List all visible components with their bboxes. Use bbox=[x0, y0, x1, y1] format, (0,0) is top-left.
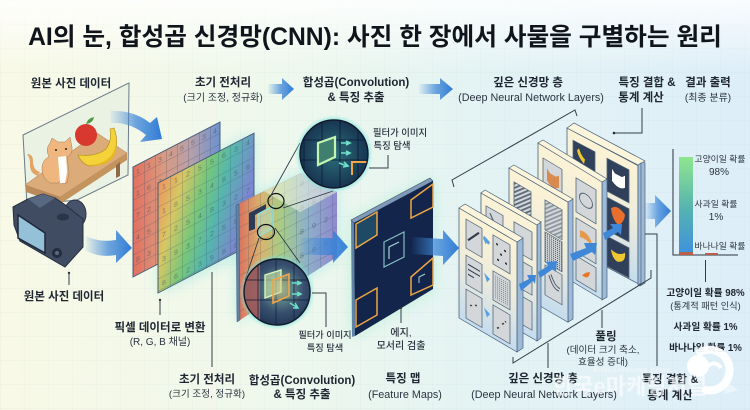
label: combine top: 통계 계산 bbox=[618, 90, 664, 104]
feature box: bottom right bbox=[411, 258, 433, 295]
chart label: banana: 바나나일 확률 bbox=[694, 240, 746, 251]
panel: pixel grid red channel: 728 bbox=[136, 198, 162, 220]
label: filter top: 특징 탐색 bbox=[373, 140, 411, 151]
arrow: layer flow 2 bbox=[538, 261, 557, 278]
feature box: bottom left bbox=[356, 288, 377, 327]
watermark: Korea e-Marketing Journal bbox=[594, 367, 671, 374]
panel: convolution grid: 892 bbox=[300, 214, 328, 237]
feature box: top right bbox=[411, 184, 433, 218]
label: output top: 결과 출력 bbox=[685, 75, 731, 89]
label: edges bbox=[377, 327, 425, 352]
bar chart bbox=[673, 149, 746, 255]
label: source photo top: 원본 사진 데이터 bbox=[31, 76, 111, 90]
panel: pixel grid red channel bbox=[133, 122, 220, 277]
panel: pixel grid RGB channels: 86235861 bbox=[162, 234, 250, 288]
label: source bottom: 원본 사진 데이터 bbox=[24, 289, 104, 303]
leader: pixel conversion bbox=[159, 299, 161, 315]
leader: chart bbox=[704, 260, 706, 282]
label: pooling: 효율성 증대) bbox=[578, 357, 628, 368]
bracket: layers top bbox=[452, 110, 577, 187]
icon: camera bbox=[13, 194, 86, 267]
label: combine top: 특징 결합 & bbox=[618, 75, 676, 89]
label: results bbox=[666, 286, 745, 354]
label: pixel conversion bbox=[114, 320, 206, 348]
label: preprocessing top bbox=[183, 75, 263, 104]
panel: pixel grid RGB channels: 11255634 bbox=[162, 138, 250, 192]
leader: combine top bbox=[613, 108, 642, 134]
label: pixel conversion: 픽셀 데이터로 변환 bbox=[114, 320, 206, 334]
arrow: photo to pixels bbox=[110, 111, 162, 142]
panel: layer 4 bbox=[538, 140, 607, 300]
label: preprocessing bottom: 초기 전처리 bbox=[179, 372, 235, 386]
label: deep layers bottom: 깊은 신경망 층 bbox=[508, 372, 578, 385]
leader: combine bottom bbox=[645, 234, 657, 366]
chart label: apple: 1% bbox=[709, 212, 723, 223]
chart label: cat: 98% bbox=[709, 167, 729, 178]
leader: feature map bbox=[400, 307, 402, 323]
glow behind grids bbox=[158, 133, 337, 322]
feature box: top left bbox=[356, 212, 377, 248]
panel: pixel grid RGB channels: 72548327 bbox=[162, 186, 250, 240]
label: pooling: 풀링 bbox=[595, 330, 617, 343]
label: pooling: (데이터 크기 축소, bbox=[567, 345, 639, 356]
panel: pixel grid red channel: 11345534 bbox=[136, 126, 217, 176]
label: preprocessing top: 초기 전처리 bbox=[195, 75, 251, 89]
label: filter top bbox=[373, 127, 427, 151]
chart label: apple bbox=[695, 198, 737, 223]
arrow: layers to chart bbox=[645, 195, 671, 228]
label: combine bottom: 특징 결합 & bbox=[641, 372, 699, 386]
label: convolution bottom: 합성곱(Convolution) bbox=[249, 373, 355, 387]
panel: layer 3 bbox=[509, 165, 573, 322]
label: deep layers bottom: (Deep Neural Network Layers) bbox=[471, 389, 617, 401]
chart label: cat bbox=[694, 153, 746, 178]
title: AI의 눈, 합성곱 신경망(CNN): 사진 한 장에서 사물을 구별하는 원리 bbox=[28, 23, 722, 51]
panel: pixel grid RGB channels: 18534856 bbox=[162, 162, 250, 216]
label: deep layers top: (Deep Neural Network Layers) bbox=[458, 92, 604, 104]
label: preprocessing bottom bbox=[169, 372, 245, 400]
panel: convolution grid: 588 bbox=[300, 238, 328, 261]
label: filter bottom bbox=[298, 329, 352, 353]
arrow: layer flow 4 bbox=[603, 224, 622, 240]
label: convolution top: & 특징 추출 bbox=[327, 91, 385, 104]
panel: pixel grid red channel: 459 bbox=[136, 220, 162, 242]
icon: magnifier bottom bbox=[241, 256, 313, 328]
panel: pixel grid red channel: 836 bbox=[136, 242, 162, 264]
arrow: convolution to feature map bbox=[300, 230, 348, 263]
label: pooling bbox=[567, 330, 639, 368]
label: results: (통계적 패턴 인식) bbox=[670, 300, 741, 311]
arrow: preprocessing to convolution bbox=[268, 78, 294, 100]
panel: layer 1 bbox=[459, 204, 523, 352]
label: results: 고양이일 확률 98% bbox=[666, 286, 745, 299]
label: results: 바나나일 확률 1% bbox=[669, 341, 742, 354]
label: filter bottom: 필터가 이미지 bbox=[298, 329, 352, 340]
arrow: feature map to layers bbox=[412, 230, 459, 265]
label: deep layers top bbox=[458, 76, 604, 104]
label: deep layers bottom bbox=[471, 372, 617, 401]
label: preprocessing top: (크기 조정, 정규화) bbox=[183, 92, 263, 104]
label: convolution top: 합성곱(Convolution) bbox=[303, 75, 409, 89]
icon: banana bbox=[78, 128, 117, 166]
leader: pooling bbox=[601, 310, 603, 328]
label: results: 사과일 확률 1% bbox=[674, 320, 738, 333]
panel: convolution grid bbox=[236, 142, 337, 322]
label: pixel conversion: (R, G, B 채널) bbox=[130, 336, 190, 348]
panel: pixel grid red channel: 163 bbox=[136, 176, 162, 198]
panel: pixel grid RGB channels: 39372585 bbox=[162, 210, 250, 264]
chart label: cat: 고양이일 확률 bbox=[694, 153, 746, 164]
feature box: centre bbox=[384, 232, 404, 267]
icon: apple bbox=[75, 117, 97, 146]
label: combine bottom bbox=[641, 372, 699, 402]
watermark: 한국e마케팅저널 bbox=[553, 374, 707, 399]
leader: preprocessing bottom bbox=[211, 272, 213, 367]
leader: filter bottom bbox=[312, 293, 326, 327]
leader: source bottom bbox=[68, 272, 70, 285]
panel: source photo bbox=[23, 83, 129, 205]
label: filter top: 필터가 이미지 bbox=[373, 127, 427, 138]
panel: layer 2 bbox=[481, 190, 541, 341]
leader: filter top bbox=[369, 155, 388, 168]
label: edges: 에지, bbox=[390, 327, 412, 339]
label: feature map bottom: 특징 맵 bbox=[386, 372, 420, 385]
label: deep layers top: 깊은 신경망 층 bbox=[493, 76, 563, 89]
panel: convolution grid: 886 bbox=[300, 190, 328, 213]
arrow: convolution to layers bbox=[419, 78, 453, 100]
panel: layer 5 bbox=[567, 123, 645, 286]
label: filter bottom: 특징 탐색 bbox=[307, 342, 343, 353]
label: convolution bottom bbox=[249, 373, 355, 401]
label: output top bbox=[685, 75, 731, 104]
filter window bbox=[249, 204, 273, 237]
label: preprocessing bottom: (크기 조정, 정규화) bbox=[169, 389, 245, 400]
arrow: layer flow 1 bbox=[519, 275, 536, 291]
panel: convolution grid: 936 bbox=[300, 166, 328, 189]
panel: feature map bbox=[351, 178, 433, 337]
label: combine top bbox=[618, 75, 676, 104]
arrow: camera to pixels bbox=[85, 230, 132, 263]
icon: cat bbox=[27, 137, 72, 183]
watermark bbox=[553, 350, 738, 399]
label: edges: 모서리 검출 bbox=[377, 339, 425, 352]
panel: pixel grid RGB channels bbox=[158, 133, 254, 293]
label: output top: (최종 분류) bbox=[685, 92, 731, 104]
chart label: apple: 사과일 확률 bbox=[695, 198, 737, 209]
leader: deep layers bottom bbox=[547, 343, 549, 368]
label: convolution top bbox=[303, 75, 409, 104]
arrow: layer flow 3 bbox=[570, 243, 597, 261]
label: feature map bottom: (Feature Maps) bbox=[368, 389, 442, 401]
label: combine bottom: 통계 계산 bbox=[647, 388, 693, 402]
bracket: layers bottom bbox=[513, 270, 651, 363]
label: convolution bottom: & 특징 추출 bbox=[273, 388, 331, 401]
icon: magnifier top bbox=[296, 117, 372, 191]
label: feature map bottom bbox=[368, 372, 442, 401]
